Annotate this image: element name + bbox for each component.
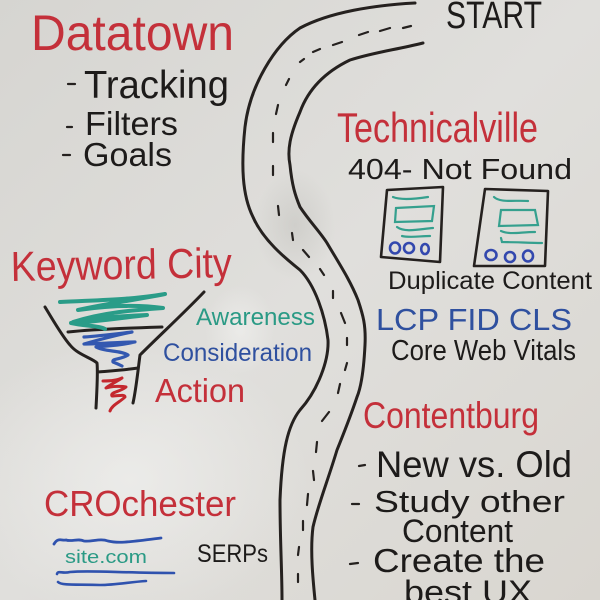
SERP sketch <box>54 538 174 585</box>
road <box>243 3 423 600</box>
heading: Datatown: Datatown <box>31 5 234 61</box>
label: Action: Action <box>155 372 245 409</box>
road: centre dashes <box>273 26 411 582</box>
panel: Keyword City <box>10 239 315 411</box>
red action scribble <box>103 378 126 411</box>
heading: Keyword City: Keyword City <box>10 239 232 290</box>
funnel chart <box>45 292 204 411</box>
heading: CROchester: CROchester <box>44 483 236 524</box>
list: Contentburg items: Study other <box>374 484 565 519</box>
icon: page two <box>474 189 548 266</box>
list: Datatown items <box>63 64 229 173</box>
road: left edge <box>243 3 415 600</box>
text: 404 Not Found: 404- Not Found <box>348 154 572 186</box>
teal awareness scribble <box>60 294 165 329</box>
list: Contentburg items: New vs. Old <box>376 444 572 485</box>
list: Datatown items: Filters <box>85 105 178 142</box>
list: Contentburg items: Content <box>402 513 513 549</box>
list: Datatown items: Goals <box>83 136 172 173</box>
label: Awareness: Awareness <box>196 304 315 331</box>
panel: Datatown <box>31 5 234 173</box>
list: Contentburg items: Create the <box>373 542 545 579</box>
funnel outline <box>45 292 204 408</box>
label: Consideration: Consideration <box>163 339 312 367</box>
blue consideration scribble <box>84 332 135 366</box>
text: LCP FID CLS: LCP FID CLS <box>376 302 572 337</box>
text: Core Web Vitals: Core Web Vitals <box>391 335 576 367</box>
list: Datatown items: Tracking <box>84 64 229 107</box>
panel: Contentburg <box>350 395 572 600</box>
panel: Technicalville <box>337 104 592 367</box>
heading: Technicalville: Technicalville <box>337 104 538 151</box>
label: site.com: site.com <box>65 547 147 567</box>
heading: Contentburg: Contentburg <box>363 395 539 436</box>
panel: CROchester <box>44 483 268 585</box>
label: SERPs: SERPs <box>197 540 268 568</box>
icon: page one <box>381 187 443 262</box>
text: Duplicate Content: Duplicate Content <box>388 267 592 295</box>
road: right edge <box>289 43 423 600</box>
list: Contentburg items <box>350 444 572 600</box>
